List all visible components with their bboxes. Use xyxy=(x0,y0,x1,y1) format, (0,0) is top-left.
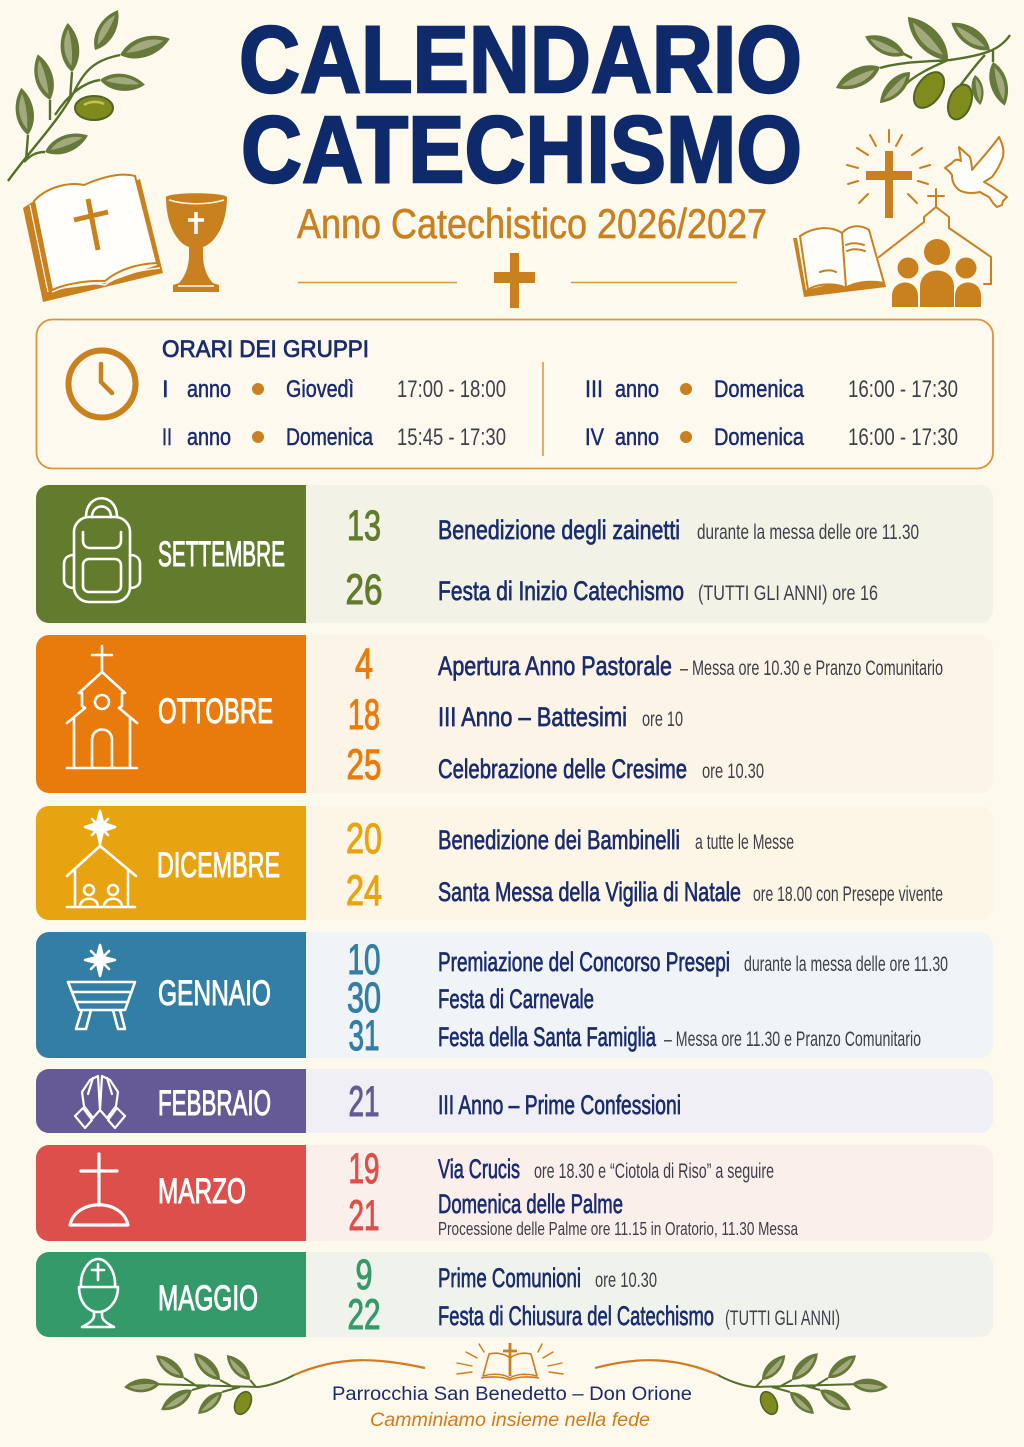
footer text: parish: Parrocchia San Benedetto – Don Orione xyxy=(332,1384,692,1405)
icon: praying hands xyxy=(75,1076,125,1128)
icon: dove xyxy=(945,137,1007,207)
event: (TUTTI GLI ANNI) xyxy=(725,1307,840,1330)
title: CATECHISMO xyxy=(241,97,802,203)
icon: footer book with cross and rays xyxy=(457,1343,563,1380)
icon: cross on hill xyxy=(70,1154,128,1225)
icon: chalice xyxy=(166,193,227,292)
event: Festa di Inizio Catechismo xyxy=(438,576,684,606)
event: ore 10.30 xyxy=(595,1269,657,1292)
month label: MAGGIO xyxy=(158,1279,258,1318)
footer branch: right xyxy=(595,1348,888,1418)
event xyxy=(438,515,919,545)
row: III anno: III xyxy=(585,376,603,403)
row: II anno: anno xyxy=(187,424,231,451)
row: III anno: Domenica xyxy=(714,376,805,403)
footer branch: left xyxy=(124,1348,425,1418)
icon: church xyxy=(67,646,137,768)
event: Premiazione del Concorso Presepi xyxy=(438,947,730,977)
icon: radiant cross xyxy=(847,130,930,218)
date: 21: 21 xyxy=(348,1078,380,1126)
event: Santa Messa della Vigilia di Natale xyxy=(438,877,741,907)
icon: clock xyxy=(68,350,136,418)
olive branch: top left xyxy=(8,6,173,181)
row: II anno: Domenica xyxy=(286,424,374,451)
event xyxy=(438,1189,799,1239)
event: III Anno – Prime Confessioni xyxy=(438,1090,681,1120)
month label: DICEMBRE xyxy=(157,846,280,885)
event: Festa della Santa Famiglia xyxy=(438,1022,657,1052)
event: ore 10.30 xyxy=(702,760,764,783)
date: 25: 25 xyxy=(346,741,382,789)
date: 9: 9 xyxy=(356,1251,372,1299)
date: 18: 18 xyxy=(348,691,380,739)
icon: open book right xyxy=(793,226,886,297)
date: 22: 22 xyxy=(348,1291,380,1339)
event: Processione delle Palme ore 11.15 in Oratorio, 11.30 Messa xyxy=(438,1219,799,1239)
title xyxy=(239,7,802,203)
row: IV anno: 16:00 - 17:30 xyxy=(848,424,958,451)
event: ore 10 xyxy=(642,708,683,731)
month label: GENNAIO xyxy=(158,974,271,1013)
row: IV anno: Domenica xyxy=(714,424,805,451)
panel: settembre xyxy=(36,485,993,623)
event: Benedizione degli zainetti xyxy=(438,515,680,545)
icon: church with people xyxy=(879,189,991,307)
date: 21: 21 xyxy=(348,1192,380,1240)
month label: SETTEMBRE xyxy=(158,535,285,574)
title: CALENDARIO xyxy=(239,7,802,113)
event: durante la messa delle ore 11.30 xyxy=(697,521,919,544)
subtitle: Anno Catechistico 2026/2027 xyxy=(297,200,767,247)
event: (TUTTI GLI ANNI) ore 16 xyxy=(698,582,878,605)
panel: maggio xyxy=(36,1251,993,1339)
date: 31: 31 xyxy=(348,1012,380,1060)
event: Celebrazione delle Cresime xyxy=(438,754,687,784)
olive branch: top right xyxy=(832,9,1013,123)
event: ore 18.30 e “Ciotola di Riso” a seguire xyxy=(534,1160,774,1183)
row: II anno xyxy=(162,424,506,451)
panel: orari dei gruppi xyxy=(36,320,993,468)
row: III anno: anno xyxy=(615,376,659,403)
panel: marzo xyxy=(36,1145,993,1241)
icon: open book with cross xyxy=(23,175,163,302)
event: a tutte le Messe xyxy=(695,831,794,854)
row: I anno: anno xyxy=(187,376,231,403)
row: IV anno xyxy=(585,424,958,451)
event: Festa di Carnevale xyxy=(438,984,594,1014)
event: Benedizione dei Bambinelli xyxy=(438,825,680,855)
icon: chalice with host xyxy=(79,1259,118,1327)
row: I anno: I xyxy=(162,376,169,403)
date: 4: 4 xyxy=(355,640,373,688)
divider with cross xyxy=(298,253,737,308)
month label: OTTOBRE xyxy=(158,692,273,731)
event: Domenica delle Palme xyxy=(438,1189,623,1219)
icon: nativity church xyxy=(67,811,136,907)
icon: backpack xyxy=(64,498,140,602)
panel: febbraio xyxy=(36,1069,993,1133)
event: Via Crucis xyxy=(438,1154,520,1184)
panel: ottobre xyxy=(36,635,993,793)
date: 26: 26 xyxy=(346,566,382,614)
heading: orari: ORARI DEI GRUPPI xyxy=(162,336,369,363)
row: I anno: Giovedì xyxy=(286,376,354,403)
icon: star and manger xyxy=(68,945,135,1029)
date: 19: 19 xyxy=(348,1145,380,1193)
footer text: motto: Camminiamo insieme nella fede xyxy=(370,1410,650,1431)
date: 24: 24 xyxy=(346,867,382,915)
event xyxy=(438,1154,774,1184)
event: III Anno – Battesimi xyxy=(438,702,627,732)
month label: FEBBRAIO xyxy=(158,1084,271,1123)
row: III anno: 16:00 - 17:30 xyxy=(848,376,958,403)
event: Apertura Anno Pastorale xyxy=(438,651,672,681)
date: 13: 13 xyxy=(347,502,381,550)
month label: MARZO xyxy=(158,1172,246,1211)
date: 10: 10 xyxy=(348,936,380,984)
row: I anno: 17:00 - 18:00 xyxy=(397,376,506,403)
event xyxy=(438,1022,921,1052)
date: 20: 20 xyxy=(346,815,382,863)
row: III anno xyxy=(585,376,958,403)
event: Prime Comunioni xyxy=(438,1263,581,1293)
row: IV anno: IV xyxy=(585,424,604,451)
event: Festa di Chiusura del Catechismo xyxy=(438,1301,714,1331)
row: II anno: 15:45 - 17:30 xyxy=(397,424,506,451)
panel: gennaio xyxy=(36,932,993,1060)
row: I anno xyxy=(162,376,506,403)
row: II anno: II xyxy=(162,424,172,451)
date: 30: 30 xyxy=(347,974,381,1022)
row: IV anno: anno xyxy=(615,424,659,451)
event xyxy=(438,651,943,681)
panel: dicembre xyxy=(36,806,993,920)
